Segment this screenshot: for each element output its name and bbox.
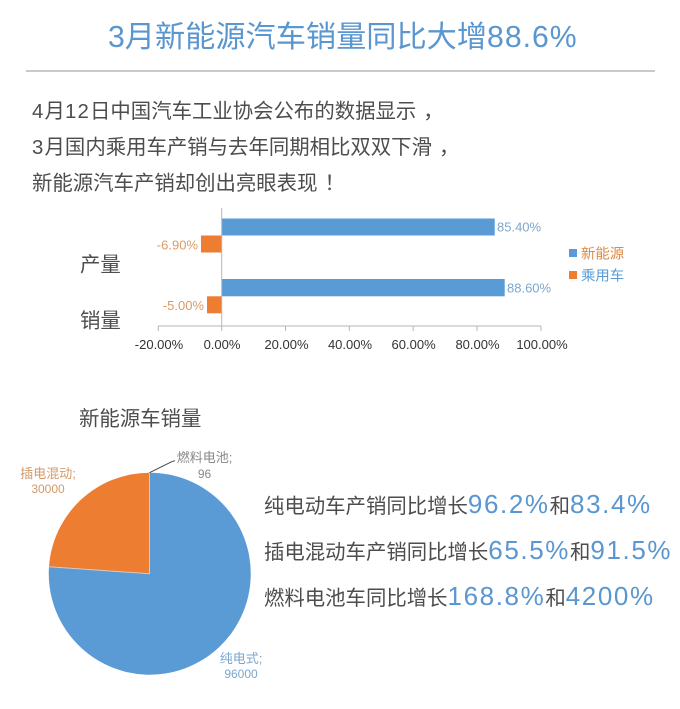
pie chart: new energy vehicle sales bbox=[20, 450, 262, 681]
axis labels bbox=[135, 337, 568, 352]
value labels: 88.60% bbox=[507, 280, 552, 296]
label: fuel cell: 燃料电池; bbox=[177, 450, 232, 465]
category labels: 产量 bbox=[80, 254, 121, 276]
label: plug-in hybrid: 插电混动; bbox=[20, 466, 76, 481]
growth statistics text bbox=[264, 489, 672, 611]
title divider bbox=[26, 70, 655, 72]
axis labels: 0.00% bbox=[204, 337, 241, 352]
intro text block: 新能源汽车产销却创出亮眼表现 ！ bbox=[32, 166, 345, 196]
bar chart: production and sales growth bbox=[80, 208, 624, 352]
axis labels: 100.00% bbox=[516, 337, 568, 352]
intro text block: 3月国内乘用车产销与去年同期相比双双下滑 ， bbox=[32, 130, 459, 160]
slice: plug-in hybrid bbox=[49, 473, 150, 574]
value labels: -6.90% bbox=[157, 238, 198, 252]
axis labels: 20.00% bbox=[264, 337, 309, 352]
axis labels: 40.00% bbox=[328, 337, 372, 352]
intro text block: 4月12日中国汽车工业协会公布的数据显示 ， bbox=[32, 94, 444, 124]
value axis bbox=[158, 208, 541, 331]
label: pure electric: 纯电式; bbox=[220, 651, 262, 666]
value labels: -5.00% bbox=[163, 298, 204, 313]
pie chart heading: 新能源车销量 bbox=[79, 408, 201, 430]
label: fuel cell: 96 bbox=[198, 467, 211, 481]
legend: 新能源 bbox=[581, 246, 624, 262]
category labels bbox=[80, 254, 121, 332]
stat line: fuel cell: 燃料电池车同比增长168.8%和4200% bbox=[264, 581, 655, 611]
slice: pure electric bbox=[49, 473, 251, 675]
axis labels: -20.00% bbox=[135, 337, 184, 352]
value labels: 85.40% bbox=[497, 220, 542, 234]
stat line: plug-in hybrid: 插电混动车产销同比增长65.5%和91.5% bbox=[264, 535, 672, 565]
bar: production passenger car bbox=[201, 236, 222, 252]
category labels: 销量 bbox=[80, 310, 121, 332]
leader line bbox=[150, 461, 175, 473]
label: plug-in hybrid: 30000 bbox=[31, 482, 65, 496]
intro text block bbox=[32, 94, 459, 196]
legend: 乘用车 bbox=[581, 268, 624, 284]
label: pure electric: 96000 bbox=[224, 667, 258, 681]
slice edges bbox=[49, 473, 150, 574]
axis labels: 80.00% bbox=[455, 337, 500, 352]
legend bbox=[569, 246, 624, 284]
bar: production new energy bbox=[222, 218, 495, 236]
title: 3月新能源汽车销量同比大增88.6% bbox=[108, 21, 578, 54]
bar: sales new energy bbox=[222, 279, 505, 296]
axis labels: 60.00% bbox=[392, 337, 436, 352]
bar: sales passenger car bbox=[207, 296, 222, 313]
value labels bbox=[157, 220, 552, 313]
stat line: pure electric: 纯电动车产销同比增长96.2%和83.4% bbox=[264, 489, 652, 519]
